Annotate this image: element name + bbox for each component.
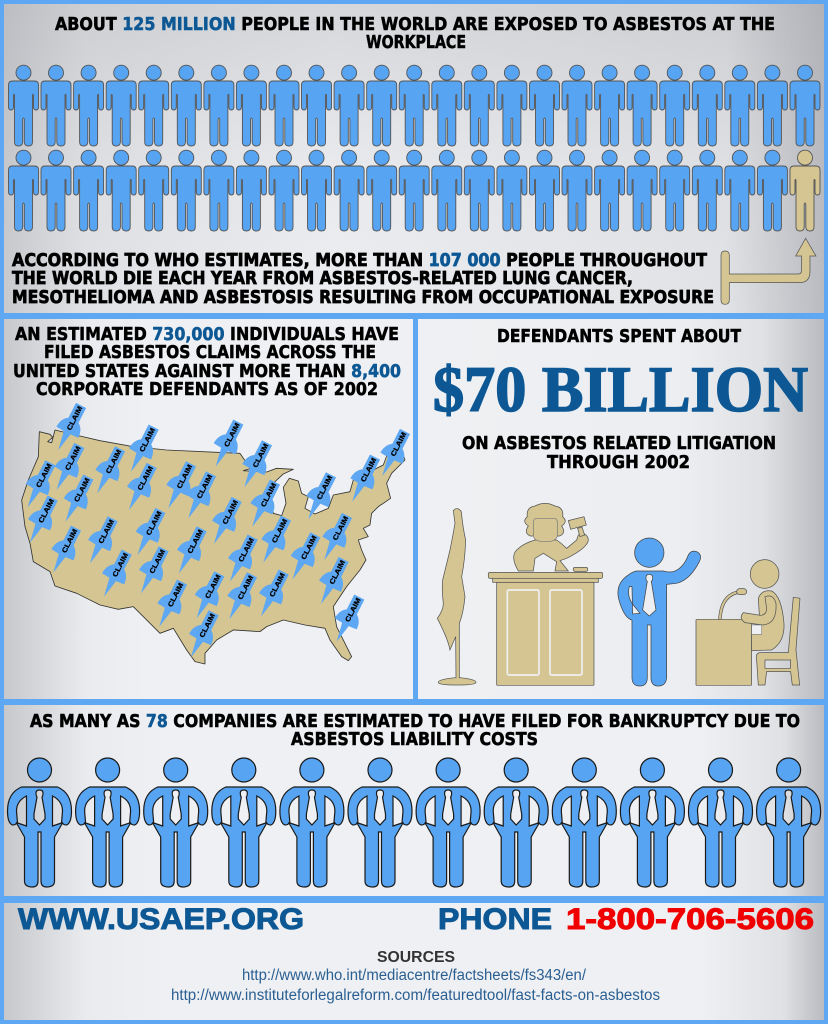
heading: 78 companies <box>30 712 800 750</box>
claim pins: CLAIM <box>390 431 408 458</box>
text: on asbestos related litigation: THROUGH 2002 <box>547 453 690 473</box>
text: WHO estimates <box>12 251 714 308</box>
claim pins: CLAIM <box>176 464 194 490</box>
map outline <box>22 430 405 664</box>
claim pins: CLAIM <box>36 463 54 489</box>
panel: asbestos claims map <box>4 319 416 699</box>
claim pins: CLAIM <box>74 477 92 503</box>
claim pins: CLAIM <box>139 427 157 453</box>
sources: http://www.instituteforlegalreform.com/featuredtool/fast-facts-on-asbestos <box>171 987 660 1004</box>
claim pins: CLAIM <box>66 405 84 432</box>
text: WHO estimates: MESOTHELIOMA AND ASBESTOSIS RESULTING FROM OCCUPATIONAL EXPOSURE <box>12 288 714 308</box>
claim pins: CLAIM <box>65 445 83 472</box>
heading: 730,000 claims: FILED ASBESTOS CLAIMS ACROSS THE <box>44 343 376 363</box>
illustration: courtroom <box>437 503 800 686</box>
claim pins: CLAIM <box>222 499 240 526</box>
arrow: from text up to tan person <box>721 238 816 304</box>
heading: 730,000 claims <box>13 325 401 400</box>
phone: 1-800-706-5606 <box>566 903 814 936</box>
claim pins <box>17 400 416 663</box>
claim pins: CLAIM <box>112 552 130 578</box>
text: on asbestos related litigation: ON ASBESTOS RELATED LITIGATION <box>462 434 776 454</box>
sources: http://www.who.int/mediacentre/factsheets/fs343/en/ <box>242 967 587 984</box>
website: WWW.USAEP.ORG <box>18 903 304 936</box>
claim pins: CLAIM <box>237 575 255 601</box>
claim pins: CLAIM <box>224 422 242 448</box>
claim pins: CLAIM <box>360 457 378 483</box>
claim pins: CLAIM <box>187 529 205 555</box>
claim pins: CLAIM <box>149 549 167 575</box>
claim pins: CLAIM <box>316 475 334 501</box>
icon: lawyer in blue <box>618 538 701 686</box>
icon: judge at bench <box>488 503 603 685</box>
claim pins: CLAIM <box>329 559 347 586</box>
claim pins: CLAIM <box>271 518 289 544</box>
claim pins: CLAIM <box>199 613 217 639</box>
panel: bankruptcies <box>4 705 824 896</box>
text: WHO estimates: THE WORLD DIE EACH YEAR FROM ASBESTOS-RELATED LUNG CANCER, <box>12 269 633 289</box>
panel: litigation cost <box>418 319 824 699</box>
icon: highlighted tan person <box>790 150 820 231</box>
heading: 730,000 claims: UNITED STATES AGAINST MORE THAN 8,400 <box>13 362 401 382</box>
claim pins: CLAIM <box>196 474 214 500</box>
claim pins: CLAIM <box>61 528 79 554</box>
heading: 125 million exposed: WORKPLACE <box>366 33 466 53</box>
claim pins: CLAIM <box>332 515 350 542</box>
heading: 125 million exposed: ABOUT 125 MILLION PEOPLE IN THE WORLD ARE EXPOSED TO ASBESTOS AT THE <box>55 15 775 35</box>
sources <box>171 949 660 1004</box>
claim pins: CLAIM <box>167 582 185 608</box>
claim pins: CLAIM <box>98 519 116 545</box>
sources: SOURCES <box>377 949 455 966</box>
text: WHO estimates: ACCORDING TO WHO ESTIMATES, MORE THAN 107 000 PEOPLE THROUGHOUT <box>12 251 707 271</box>
heading: 78 companies: ASBESTOS LIABILITY COSTS <box>291 730 538 750</box>
map: United States with claim pins <box>17 400 416 664</box>
text: defendants spent about: DEFENDANTS SPENT ABOUT <box>497 327 741 347</box>
panel: workplace exposure <box>4 4 824 313</box>
icon row: people row one <box>8 65 820 146</box>
claim pins: CLAIM <box>252 443 270 469</box>
icon: flag on pole <box>437 509 476 685</box>
claim pins: CLAIM <box>301 535 319 561</box>
claim pins: CLAIM <box>38 498 56 524</box>
panel: contact and sources <box>4 903 824 1020</box>
claim pins: CLAIM <box>260 482 278 508</box>
icon row: twelve businessmen <box>8 758 821 887</box>
claim pins: CLAIM <box>269 572 287 598</box>
heading: 125 million exposed <box>55 15 775 53</box>
claim pins: CLAIM <box>345 597 363 623</box>
claim pins: CLAIM <box>205 574 223 600</box>
big number: $70 billion: $70 BILLION <box>433 354 808 426</box>
text: on asbestos related litigation <box>462 434 776 473</box>
phone: PHONE <box>438 903 552 936</box>
heading: 730,000 claims: CORPORATE DEFENDANTS AS OF 2002 <box>36 380 378 400</box>
claim pins: CLAIM <box>137 465 155 492</box>
icon row: people row two <box>8 150 787 231</box>
heading: 730,000 claims: AN ESTIMATED 730,000 INDIVIDUALS HAVE <box>15 325 399 345</box>
claim pins: CLAIM <box>105 449 123 475</box>
phone <box>438 903 814 936</box>
claim pins: CLAIM <box>146 510 164 537</box>
claim pins: CLAIM <box>238 537 256 563</box>
icon: seated witness at desk <box>696 560 800 685</box>
